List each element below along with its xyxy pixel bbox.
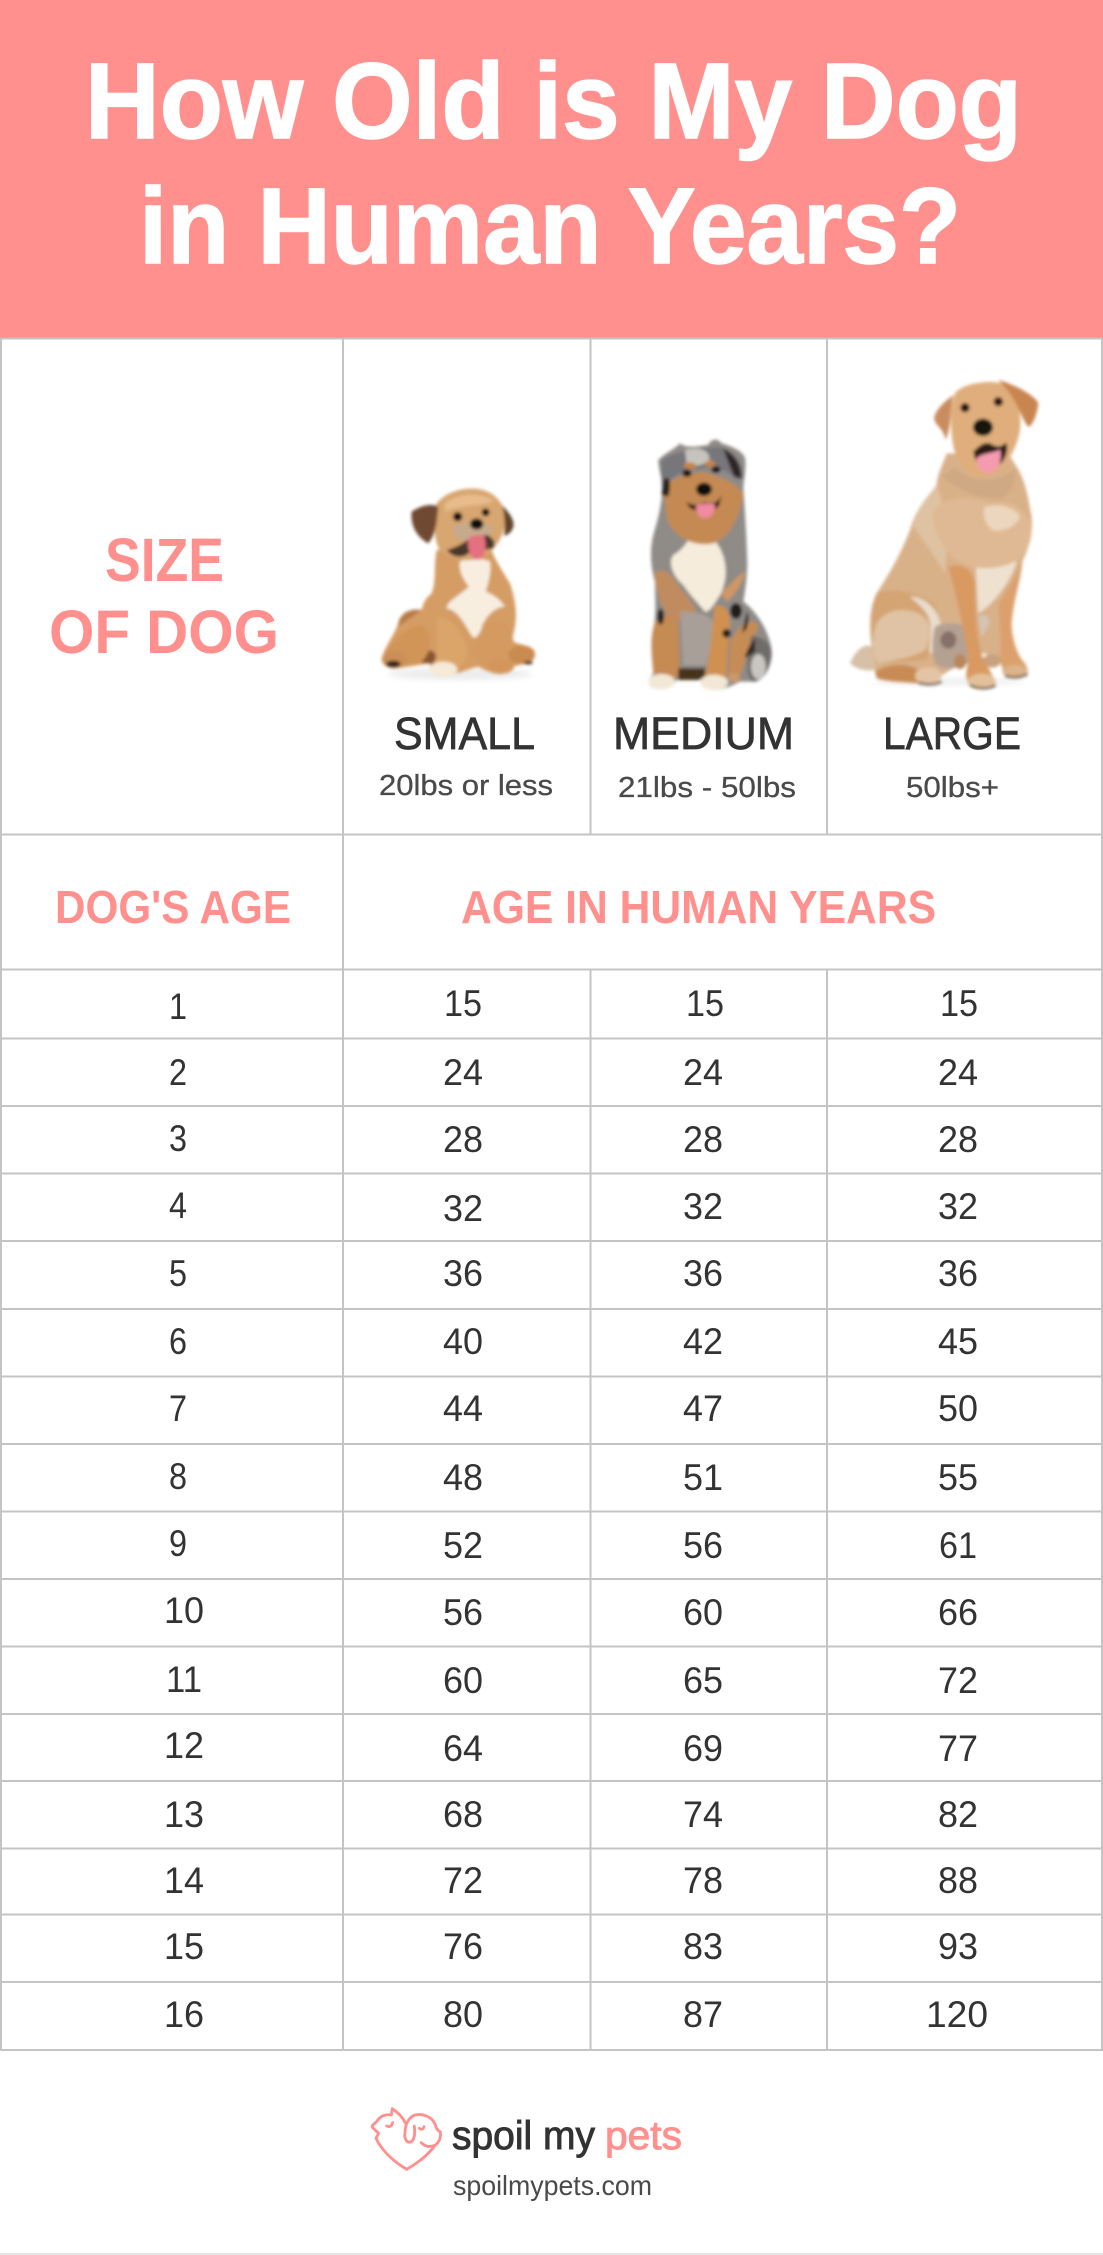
table row: age 1: 15 [940,983,978,1024]
table row: age 11: 72 [938,1660,978,1701]
table row: age 8: 55 [938,1457,978,1498]
table row: age 16: 87 [683,1994,723,2035]
table row: age 4: 4 [169,1185,187,1226]
heading: dog's age: DOG'S AGE [55,881,291,933]
table row: age 12: 64 [443,1728,483,1769]
table row: age 9 [169,1523,977,1566]
table row: age 2: 24 [683,1052,723,1093]
table row: age 5: 36 [938,1253,978,1294]
heading: size of dog: OF DOG [49,598,279,666]
table row: age 3: 28 [443,1119,483,1160]
table row: age 15: 93 [938,1926,978,1967]
photo: medium dog [648,440,772,690]
table row: age 5: 36 [443,1253,483,1294]
table row: age 5 [169,1253,978,1294]
table row: age 10: 66 [938,1592,978,1633]
table row: age 2 [169,1052,978,1093]
table row: age 15: 76 [443,1926,483,1967]
table row: age 13: 68 [443,1794,483,1835]
table row: age 9: 61 [939,1525,977,1566]
table row: age 9: 52 [443,1525,483,1566]
table row: age 7: 44 [443,1388,483,1429]
table row: age 6: 45 [938,1321,978,1362]
table row: age 7: 47 [683,1388,723,1429]
table row: age 4: 32 [683,1186,723,1227]
table row: age 10: 60 [683,1592,723,1633]
footer logo: spoil my [452,2114,595,2158]
table row: age 7 [169,1388,978,1429]
table row: age 13: 82 [938,1794,978,1835]
table row: age 12: 77 [938,1728,978,1769]
table row: age 10: 10 [164,1590,204,1631]
table row: age 1: 1 [169,986,187,1027]
label: small: SMALL [394,708,535,759]
table row: age 3: 3 [169,1118,187,1159]
label: medium: MEDIUM [613,708,794,759]
title banner: How Old is My Dog [85,40,1022,161]
table row: age 14: 88 [938,1860,978,1901]
table row: age 3: 28 [938,1119,978,1160]
table row: age 6: 40 [443,1321,483,1362]
photo: small dog [382,489,535,680]
label: medium [613,708,796,804]
table row: age 7: 7 [169,1388,187,1429]
table row: age 5: 36 [683,1253,723,1294]
table row: age 11 [166,1659,978,1701]
table row: age 13: 74 [683,1794,723,1835]
label: small [379,708,553,802]
table row: age 16: 16 [164,1994,204,2035]
table row: age 4 [169,1185,978,1229]
table row: age 5: 5 [169,1253,187,1294]
footer logo [372,2109,682,2201]
table row: age 2: 24 [938,1052,978,1093]
table row: age 10 [164,1590,978,1633]
table row: age 7: 50 [938,1388,978,1429]
table row: age 11: 60 [443,1660,483,1701]
table row: age 15 [164,1926,978,1967]
table row: age 14 [164,1860,978,1901]
table row: age 14: 78 [683,1860,723,1901]
heading: size of dog [49,526,279,666]
photo: large dog [850,380,1038,690]
table row: age 1 [169,983,978,1027]
table row: age 15: 83 [683,1926,723,1967]
table row: age 6: 42 [683,1321,723,1362]
heading: age in human years: AGE IN HUMAN YEARS [461,881,936,933]
table row: age 8: 48 [443,1457,483,1498]
table row: age 11: 11 [166,1659,202,1700]
table row: age 12: 12 [164,1725,204,1766]
table row: age 4: 32 [938,1186,978,1227]
table row: age 13: 13 [164,1794,204,1835]
table row: age 12: 69 [683,1728,723,1769]
table row: age 6: 6 [169,1321,187,1362]
table row: age 8 [169,1456,978,1498]
table row: age 4: 32 [443,1188,483,1229]
table row: age 8: 8 [169,1456,187,1497]
table row: age 13 [164,1794,978,1835]
table row: age 1: 15 [444,983,482,1024]
table row: age 2: 2 [169,1052,187,1093]
table row: age 16: 120 [926,1994,988,2035]
label: large: 50lbs+ [906,772,999,804]
table row: age 3 [169,1118,978,1160]
table row: age 8: 51 [683,1457,723,1498]
table row: age 3: 28 [683,1119,723,1160]
table row: age 14: 14 [164,1860,204,1901]
table row: age 2: 24 [443,1052,483,1093]
table row: age 11: 65 [683,1660,723,1701]
table row: age 12 [164,1725,978,1769]
table row: age 10: 56 [443,1592,483,1633]
table row: age 6 [169,1321,978,1362]
title banner: in Human Years? [139,165,961,286]
footer logo: spoilmypets.com [453,2170,652,2201]
table row: age 1: 15 [686,983,724,1024]
label: large [883,708,1021,804]
footer logo: pets [605,2114,682,2158]
heading: size of dog: SIZE [105,526,224,594]
table row: age 9: 56 [683,1525,723,1566]
table row: age 16 [164,1994,988,2035]
icon: cat and dog heart [372,2109,441,2169]
table row: age 16: 80 [443,1994,483,2035]
title banner [0,0,1103,338]
label: small: 20lbs or less [379,770,553,802]
label: large: LARGE [883,708,1021,759]
table row: age 15: 15 [164,1926,204,1967]
table row: age 14: 72 [443,1860,483,1901]
table row: age 9: 9 [169,1523,187,1564]
label: medium: 21lbs - 50lbs [618,772,796,804]
